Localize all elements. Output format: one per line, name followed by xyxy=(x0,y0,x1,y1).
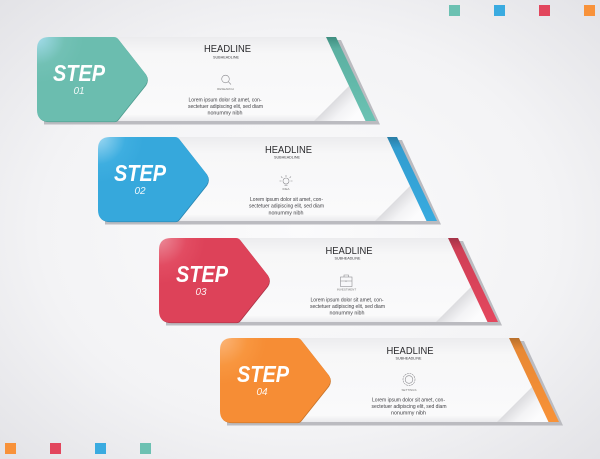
panel: step 04 xyxy=(220,338,563,426)
icon: light bulb xyxy=(280,175,292,185)
body text: nonummy nibh xyxy=(208,110,243,116)
body text xyxy=(372,398,446,416)
body text: sectetuer adipiscing elit, sed diam xyxy=(372,404,446,410)
icon label: INVESTMENT xyxy=(337,288,356,292)
panel: step 03 xyxy=(159,238,502,326)
body text: sectetuer adipiscing elit, sed diam xyxy=(188,104,263,110)
heading: HEADLINE xyxy=(326,245,372,257)
heading: HEADLINE xyxy=(386,345,434,357)
label: STEP: STEP xyxy=(53,60,106,86)
body text: Lorem ipsum dolor sit amet, con- xyxy=(372,398,445,404)
badge: step 03 xyxy=(159,238,269,322)
badge: step 04 xyxy=(220,338,330,422)
panel: step 01 xyxy=(37,37,380,124)
subheading: SUBHEADLINE xyxy=(213,54,239,60)
icon: magnifier xyxy=(222,75,231,84)
heading: HEADLINE xyxy=(265,144,312,156)
body text: Lorem ipsum dolor sit amet, con- xyxy=(250,197,323,203)
body text: Lorem ipsum dolor sit amet, con- xyxy=(310,298,384,304)
body text: sectetuer adipiscing elit, sed diam xyxy=(310,304,385,310)
number: 02: 02 xyxy=(134,186,146,197)
icon: briefcase xyxy=(340,275,352,286)
label: STEP: STEP xyxy=(114,160,167,186)
top colour squares xyxy=(449,5,595,16)
badge: step 01 xyxy=(37,37,147,122)
body text xyxy=(188,98,263,116)
label: STEP: STEP xyxy=(176,261,229,287)
subheading: SUBHEADLINE xyxy=(334,256,361,260)
icon label: SETTINGS xyxy=(401,388,417,392)
number: 03: 03 xyxy=(195,287,207,298)
icon label: IDEA xyxy=(282,187,290,191)
number: 01: 01 xyxy=(73,86,85,97)
number: 04: 04 xyxy=(256,387,268,398)
heading: HEADLINE xyxy=(204,43,251,55)
body text xyxy=(310,298,385,316)
subheading: SUBHEADLINE xyxy=(274,154,300,160)
body text: nonummy nibh xyxy=(330,310,365,316)
body text: Lorem ipsum dolor sit amet, con- xyxy=(188,98,262,104)
panel: step 02 xyxy=(98,137,441,224)
icon label: RESEARCH xyxy=(217,87,234,91)
body text: nonummy nibh xyxy=(268,210,304,216)
badge: step 02 xyxy=(98,137,208,222)
bottom colour squares xyxy=(5,443,151,454)
subheading: SUBHEADLINE xyxy=(396,356,422,360)
body text: sectetuer adipiscing elit, sed diam xyxy=(249,204,324,210)
body text: nonummy nibh xyxy=(391,410,426,416)
body text xyxy=(249,197,324,216)
label: STEP: STEP xyxy=(237,361,290,387)
icon: settings gear xyxy=(403,374,415,386)
